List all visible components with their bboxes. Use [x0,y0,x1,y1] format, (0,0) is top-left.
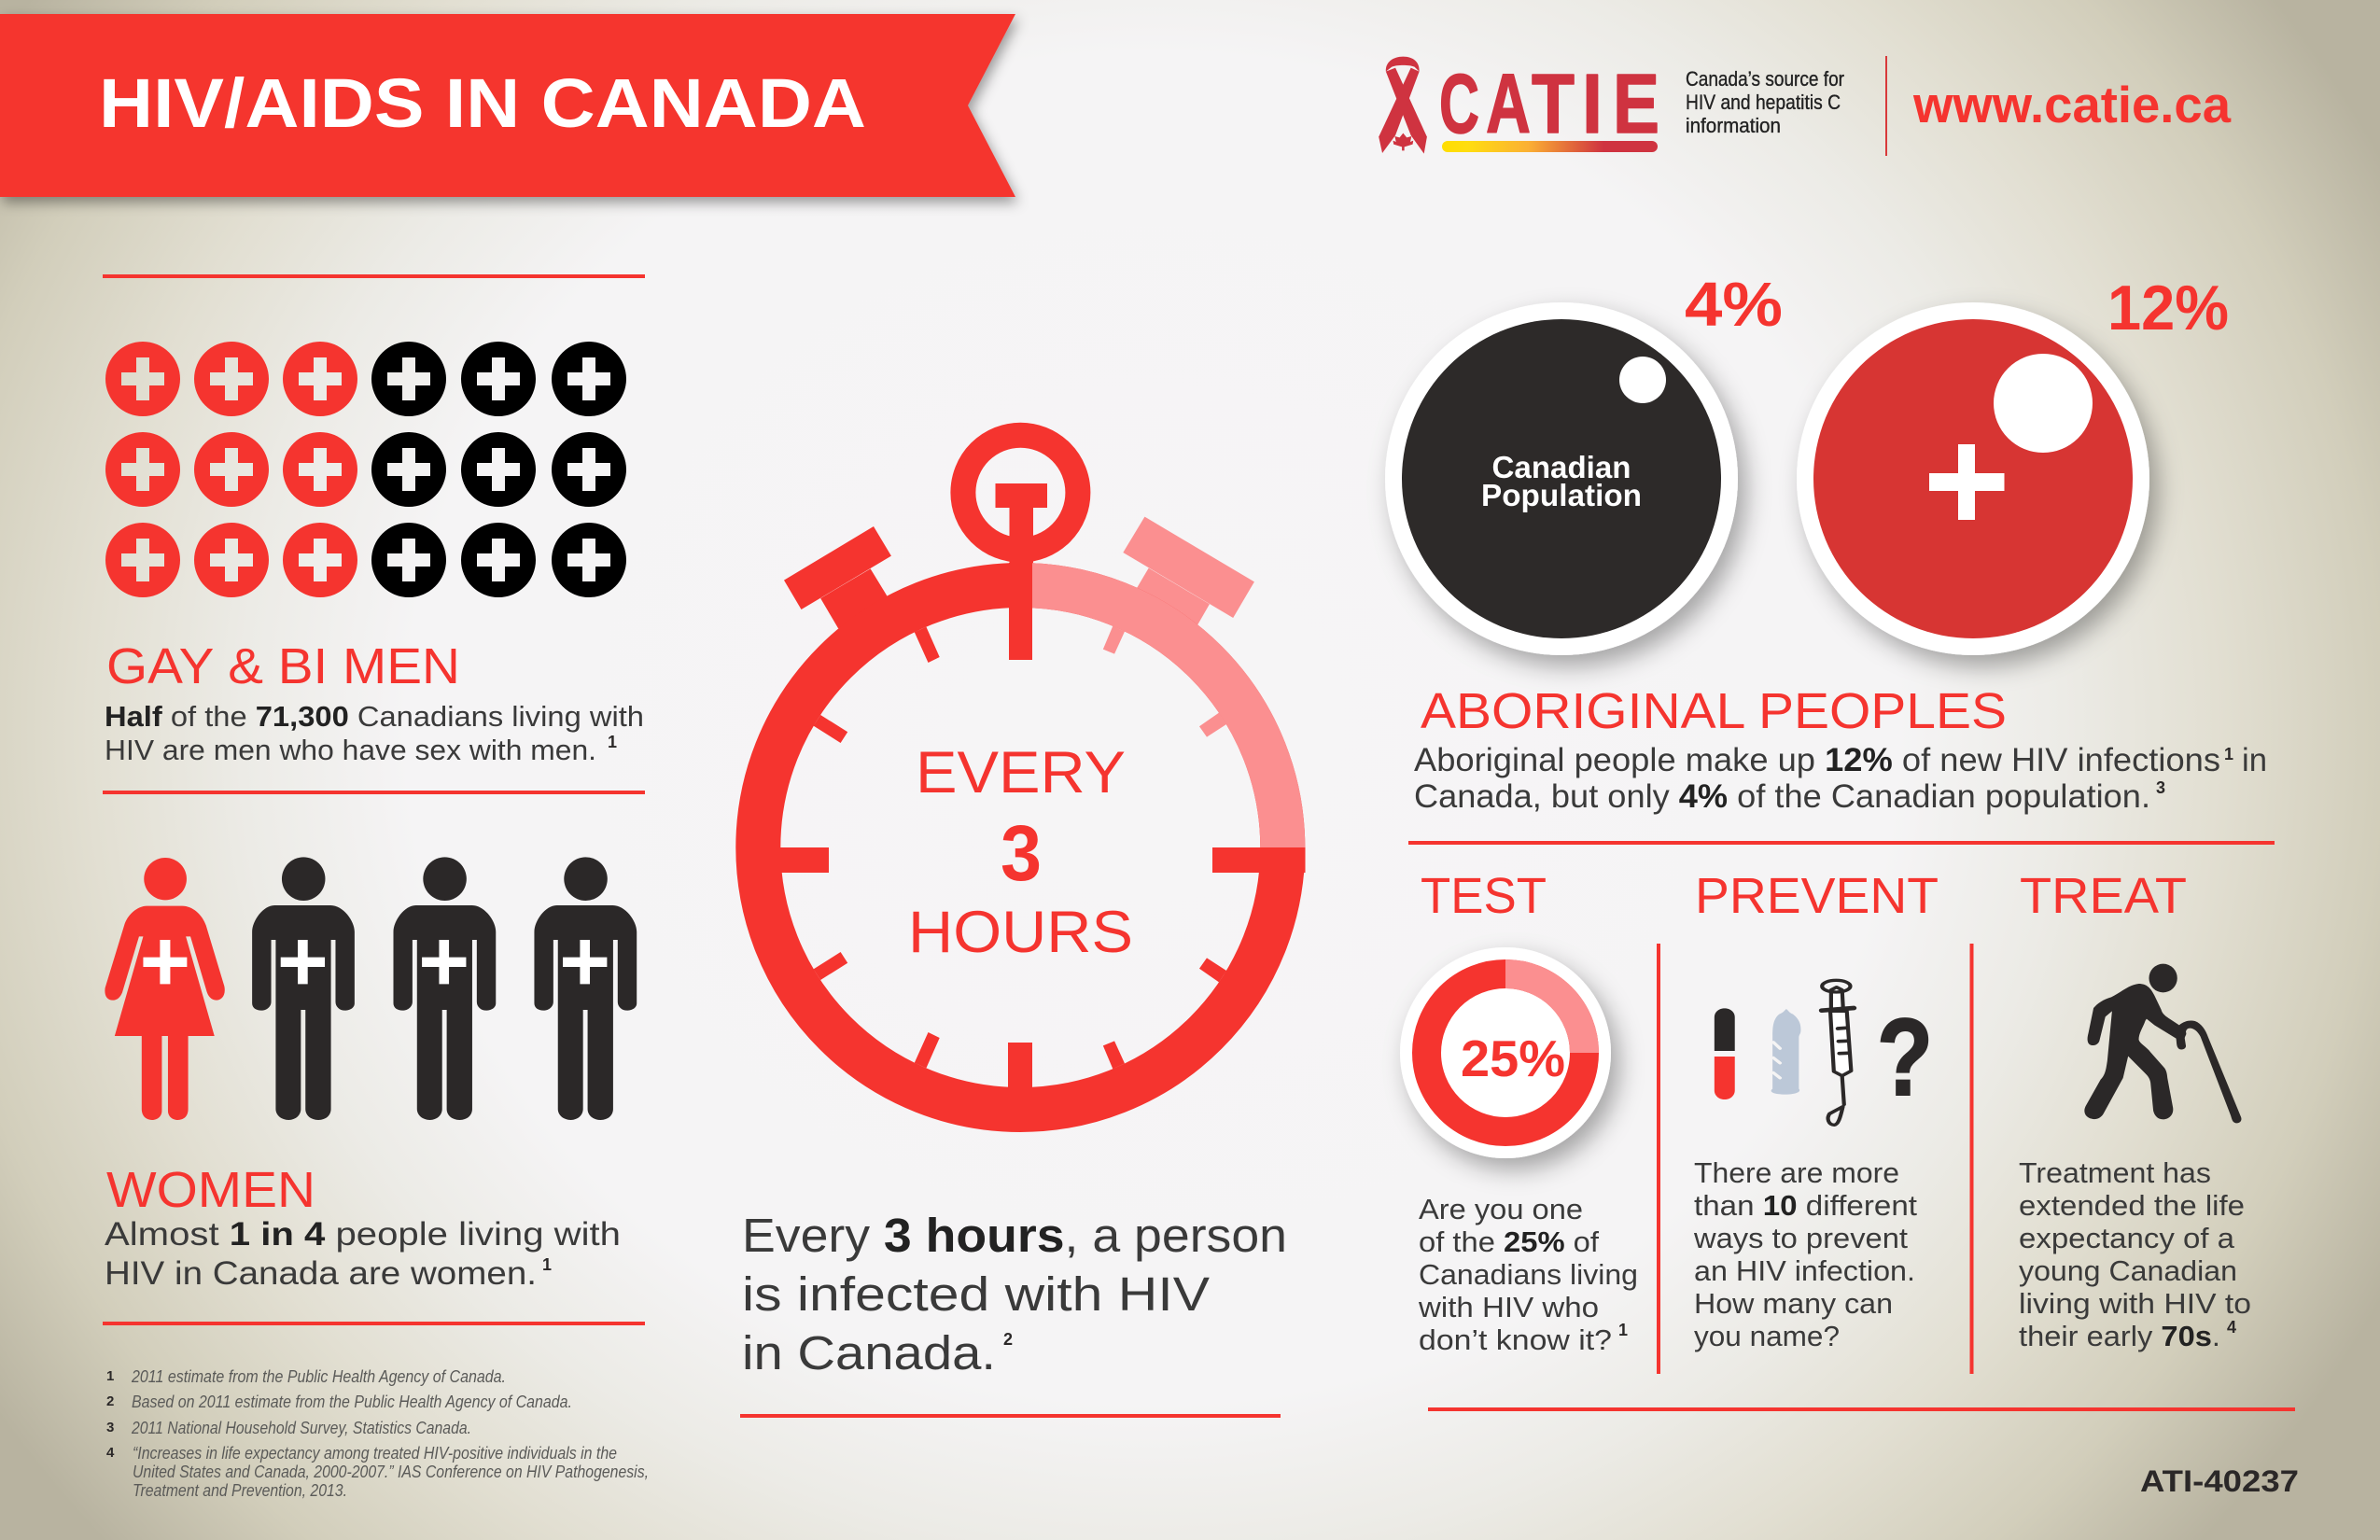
footnotes [106,1367,649,1500]
text: prevent: There are more [1694,1156,1899,1189]
stat: 12 percent: 12% [2107,273,2229,343]
tagline: HIV and hepatitis C [1686,91,1841,114]
text: test: of the 25% of [1419,1225,1599,1258]
CATIE wordmark: C [1439,58,1479,151]
footnotes: 2 [106,1393,114,1409]
footnotes: 4 [106,1445,115,1461]
icon: woman [105,858,225,1120]
website url: www.catie.ca [1912,76,2231,133]
icon: question mark: ? [1877,996,1933,1118]
icon: man 3 [534,857,637,1120]
stopwatch label: EVERY [916,740,1126,805]
circle: canadian population [1385,302,1738,655]
icon grid: plus circles [105,342,626,597]
document code: ATI-40237 [2140,1464,2299,1498]
circle: aboriginal peoples [1797,302,2149,655]
footnotes: 3 [106,1420,114,1435]
text: gay and bi men: Half of the 71,300 Canadians living with [105,700,644,733]
heading: aboriginal peoples: ABORIGINAL PEOPLES [1421,683,2007,739]
text: treat [2019,1156,2251,1352]
CATIE wordmark: E [1613,58,1659,151]
text: prevent: How many can [1694,1287,1893,1320]
CATIE wordmark: T [1532,58,1575,151]
text: prevent [1693,1156,1917,1352]
text: every 3 hours: Every 3 hours, a person [742,1209,1287,1262]
text: treat: expectancy of a [2019,1222,2235,1254]
text: every 3 hours: 2 [1003,1330,1013,1349]
stopwatch label: 3 [1001,809,1042,897]
text: treat: their early 70s. [2019,1320,2220,1352]
text: treat: young Canadian [2019,1254,2237,1287]
footnotes: 2011 National Household Survey, Statistics Canada. [131,1419,471,1437]
heading: test: TEST [1421,868,1547,924]
title: HIV/AIDS IN CANADA [99,64,866,142]
text: test: with HIV who [1418,1291,1599,1323]
prevention icons [1715,980,1854,1125]
dial ring [758,585,1282,1110]
donut chart: 25 percent [1400,947,1611,1158]
text: aboriginal peoples: 3 [2156,778,2165,797]
text: treat: 4 [2227,1318,2236,1337]
footnotes: 1 [106,1368,114,1384]
icon: elderly person with cane [2084,964,2241,1123]
text: gay and bi men: 1 [608,733,617,751]
text: treat: living with HIV to [2019,1287,2251,1320]
circle: canadian population: Canadian [1491,450,1631,484]
circle: canadian population: Population [1481,478,1642,512]
text: prevent: an HIV infection. [1694,1254,1915,1287]
text: aboriginal peoples [1414,742,2267,815]
text: test [1418,1193,1638,1356]
heading: gay and bi men: GAY & BI MEN [106,638,460,694]
icon: man 1 [252,857,355,1120]
text: treat: extended the life [2019,1189,2245,1222]
CATIE wordmark: I [1582,58,1603,151]
icon: red ribbon with maple leaf [1379,57,1427,154]
text: women: 1 [542,1255,552,1274]
tagline: Canada’s source for [1686,67,1844,91]
text: aboriginal peoples: Aboriginal people make up 12% of new HIV infections [1414,742,2220,778]
icon row: one woman and three men [105,857,637,1120]
heading: treat: TREAT [2020,868,2187,924]
text: test: Canadians living [1419,1258,1638,1291]
text: women [105,1216,621,1292]
text: aboriginal peoples: 1 [2224,745,2233,763]
tick marks [780,563,1305,1089]
stopwatch label: HOURS [908,900,1133,965]
text: test: Are you one [1419,1193,1583,1225]
text: treat: Treatment has [2019,1156,2211,1189]
gradient bar [1442,141,1658,152]
footnotes: “Increases in life expectancy among treated HIV-positive individuals in the [133,1444,617,1463]
text: prevent: ways to prevent [1693,1222,1908,1254]
text: aboriginal peoples: Canada, but only 4% of the Canadian population. [1414,778,2150,815]
logo: CATIE [1379,57,1844,154]
title banner [0,14,1015,197]
text: test: 1 [1618,1321,1628,1339]
icon: syringe [1822,980,1854,1125]
text: women: HIV in Canada are women. [105,1255,537,1292]
text: every 3 hours: is infected with HIV [742,1267,1210,1321]
text: prevent: than 10 different [1694,1189,1917,1222]
tagline: information [1686,114,1781,137]
footnotes: United States and Canada, 2000-2007.” IAS Conference on HIV Pathogenesis, [133,1463,649,1481]
footnotes: Based on 2011 estimate from the Public Health Agency of Canada. [132,1393,572,1411]
text: women: Almost 1 in 4 people living with [105,1216,621,1253]
heading: women: WOMEN [106,1162,315,1218]
stat: 4 percent: 4% [1685,270,1783,340]
text: every 3 hours: in Canada. [742,1326,996,1379]
text: gay and bi men [105,700,644,766]
text: test: don’t know it? [1419,1323,1612,1356]
stopwatch [758,435,1305,1110]
top crown [963,435,1078,569]
donut chart: 25 percent: 25% [1461,1029,1565,1087]
text: prevent: you name? [1694,1320,1840,1352]
heading: prevent: PREVENT [1695,868,1939,924]
footnotes: 2011 estimate from the Public Health Agency of Canada. [131,1367,506,1386]
side buttons [784,517,1254,628]
icon: test tube [1715,1008,1735,1099]
stopwatch label [908,740,1133,965]
text: every 3 hours [742,1209,1287,1379]
CATIE wordmark: A [1486,58,1531,151]
text: gay and bi men: HIV are men who have sex with men. [105,734,596,766]
icon: man 2 [393,857,496,1120]
footnotes: Treatment and Prevention, 2013. [133,1481,347,1500]
icon: condom [1771,1009,1800,1095]
CATIE wordmark [1439,58,1659,151]
text: aboriginal peoples: in [2242,742,2267,778]
tagline [1686,67,1844,137]
